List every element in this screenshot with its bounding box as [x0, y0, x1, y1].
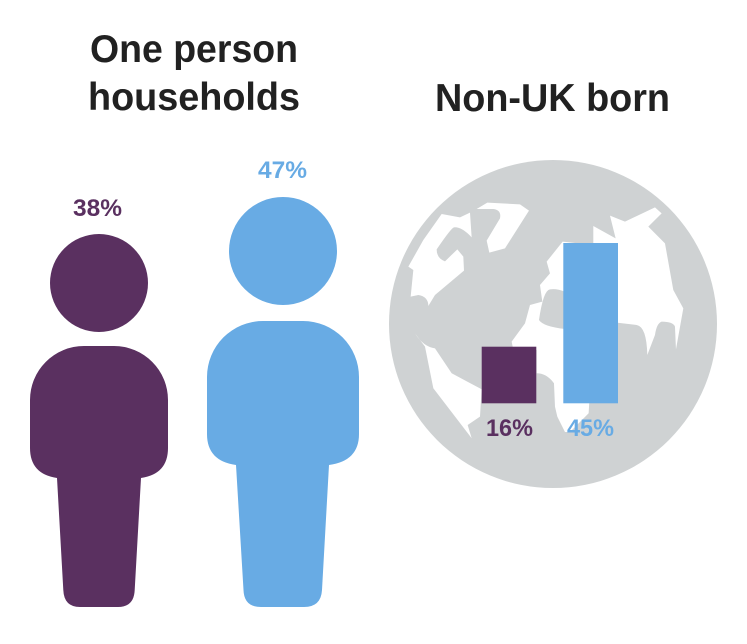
label: 47%: 47% — [258, 157, 307, 184]
heading: one person households — [88, 28, 300, 119]
bar: 16% — [482, 347, 536, 403]
label: 38%: 38% — [73, 195, 122, 222]
icon: purple person — [30, 234, 168, 607]
icon: globe — [389, 160, 717, 488]
bar: 45% — [563, 243, 618, 403]
heading: one person households: households — [88, 76, 300, 119]
heading: non-UK born: Non-UK born — [435, 77, 670, 120]
label: 16%: 16% — [486, 415, 533, 442]
icon: blue person — [207, 197, 359, 607]
label: 45%: 45% — [567, 415, 614, 442]
heading: one person households: One person — [90, 28, 298, 71]
